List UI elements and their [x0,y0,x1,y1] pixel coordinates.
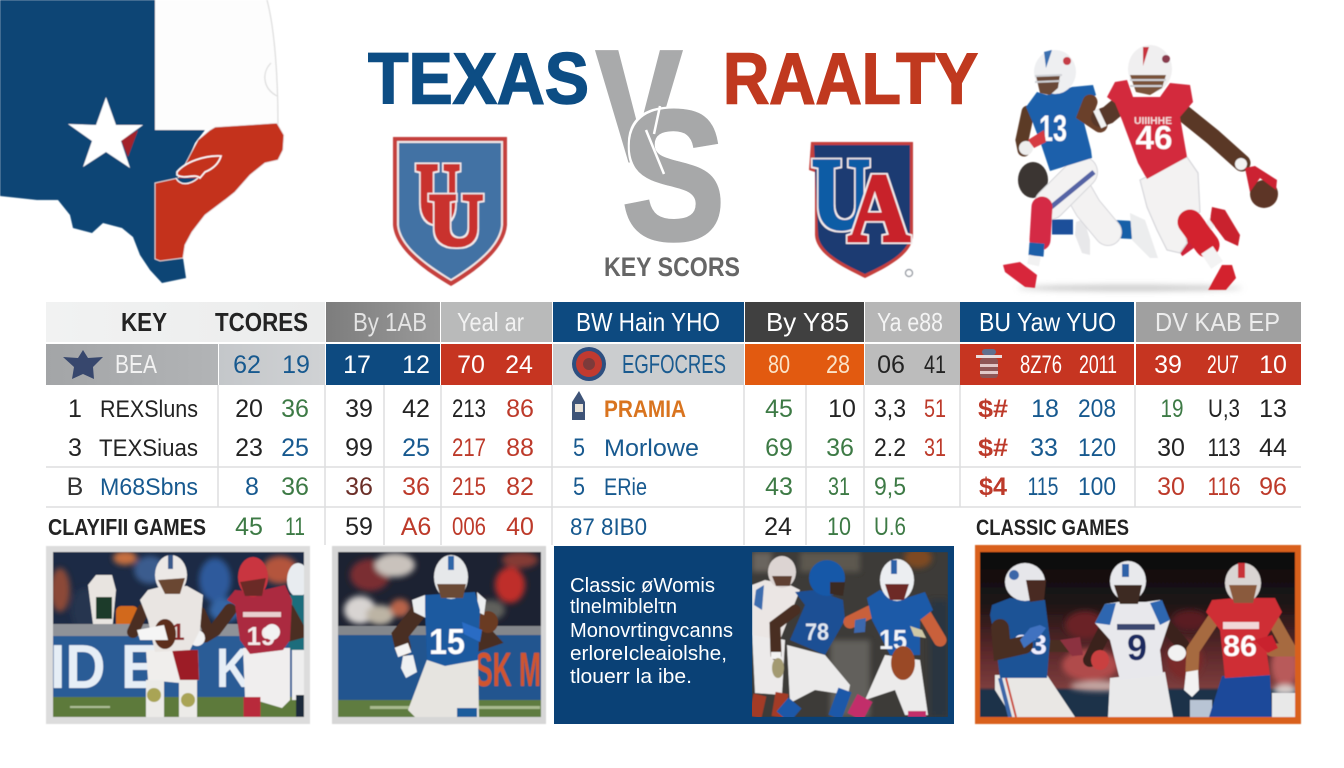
table row 1: 20 [235,395,263,423]
table team row: 2011 [1079,351,1117,379]
table row 1: REXSluns [100,396,198,423]
table row 1: PRAMIA [604,396,686,423]
table row 2: 5 [573,434,585,462]
table row 3: M68Sbns [100,474,198,501]
icon: VS mark: S [622,72,725,278]
icon: U shield: U [416,145,460,241]
table team row: 06 [877,351,905,379]
table header row: BU Yaw YUO [979,307,1116,337]
table row 3: 8 [245,473,259,501]
table header row: BW Hain YHO [576,307,720,337]
white player: 1 [171,619,185,646]
table row 3: 36 [345,473,373,501]
table row 2: 217 [452,434,486,462]
third player [287,563,309,717]
table row 4: classic games: 40 [506,513,534,541]
table row 4: classic games [48,513,1129,541]
table row 4: classic games: CLASSIC GAMES [976,515,1129,540]
paragraph [570,575,733,688]
table row 4: classic games: CLAYIFII GAMES [48,514,206,540]
table row 1: 51 [924,395,946,423]
middle player [771,560,850,717]
photo 2: blue jersey player [332,546,546,724]
blue player: 13 [1039,108,1067,149]
table row 2: 44 [1259,434,1287,462]
scoreboard table [46,302,1301,545]
table row 3: 115 [1028,473,1058,501]
right player [1184,563,1290,717]
paragraph: Classic øWomis [570,575,715,597]
table row 3: 82 [506,473,534,501]
table row 1: 213 [452,395,486,423]
table row 2: Morlowe [604,435,699,462]
blue player [1003,50,1158,288]
middle player: 78 [805,619,829,646]
table row 4: classic games: 11 [285,513,305,541]
right player: 15 [879,624,907,655]
table row 1: 45 [765,395,793,423]
table row 4: classic games: 87 8IB0 [570,514,647,541]
table row 3: 116 [1208,473,1240,501]
table header row: TCORES [215,307,308,337]
table row 4: classic games: 59 [345,513,373,541]
left player [990,563,1083,717]
table row 1: U,3 [1208,395,1240,423]
icon: UA shield: A [848,155,910,263]
icon: U shield: U [429,180,483,262]
red player: UIIIHHE [1134,116,1172,127]
banner text: ID E [50,633,158,702]
table row 3: ERie [604,474,647,501]
table team row: 17 [343,351,371,379]
table row 2: 69 [765,434,793,462]
table row 1: 36 [281,395,309,423]
table row 2: 88 [506,434,534,462]
table row 2: 36 [826,434,854,462]
panel: Texas map [0,0,284,283]
table header row: Ya e88 [877,307,943,337]
table header row: Yeal ar [457,307,524,337]
middle player [1090,561,1186,717]
table row 4: classic games: 45 [235,513,263,541]
icon: striped emblem [976,349,1002,378]
table row 4: classic games: A6 [401,513,431,541]
middle player: 9 [1127,627,1147,668]
banner letter: K [216,636,250,699]
table row 4: classic games: U.6 [874,513,906,541]
table team row: EGFOCRES [622,349,726,379]
title: Raalty: RAALTY [723,40,978,120]
back player [752,556,800,717]
player [395,555,498,717]
table row 2: 25 [281,434,309,462]
paragraph: tlnelmiblelτn [570,596,677,618]
player: 15 [429,621,465,662]
icon: U shield [393,137,507,286]
table row 1: 3,3 [874,395,906,423]
table team row: 70 [457,351,485,379]
table row 1: 19 [1160,395,1184,423]
table row 3: 43 [765,473,793,501]
table row 4: classic games: 10 [827,513,851,541]
table grid lines [46,385,1301,545]
table header row: By 1AB [353,307,427,337]
title: Texas: TEXAS [368,40,589,120]
icon: small mascot [572,391,585,420]
icon: UA shield: U [812,138,870,251]
photo 4: three players with orange border [975,545,1301,724]
table row 1: 18 [1031,395,1059,423]
table row 2: 3 [68,434,82,462]
table team row: 2U7 [1207,351,1239,379]
table team row: 28 [826,351,850,379]
table row 2: 31 [924,434,946,462]
paragraph: tlouerr la ibe. [570,666,692,688]
table row 1: 42 [402,395,430,423]
icon: UA shield [809,138,913,278]
table header row: By Y85 [766,307,849,337]
left player: 03 [1013,629,1047,660]
table team row: 41 [924,351,946,379]
table row 2: 120 [1078,434,1116,462]
red player: 19 [247,621,275,651]
table row 1: 208 [1078,395,1116,423]
table row 3: 100 [1078,473,1116,501]
red player [1096,45,1278,290]
table team row: 62 [233,351,261,379]
table row 2: 23 [235,434,263,462]
table row 3: $4 [979,473,1007,501]
table team row: 8Z76 [1020,351,1062,379]
table row 3: 215 [452,473,486,501]
icon: round crest [572,347,606,381]
table row 2: 30 [1157,434,1185,462]
white player [133,555,208,717]
paragraph: Monovrtingvcanns [570,620,733,642]
table row 1: 1 [68,395,82,423]
table row 3: 36 [402,473,430,501]
icon: VS mark: V [597,20,681,194]
table row 2 [68,434,1287,462]
table header row: DV KAB EP [1155,307,1280,337]
table row 1 [68,391,1287,423]
table team row: 19 [282,351,310,379]
table team row: 24 [505,351,533,379]
caption: key scores: KEY SCORS [604,252,740,282]
table team row [46,344,1301,385]
paragraph: erloreIcleaiolshe, [570,643,727,665]
table row 3: 30 [1157,473,1185,501]
table row 3 [67,473,1287,501]
illustration: two running football players [1003,45,1278,291]
table row 2: TEXSiuas [99,435,198,462]
table row 3: 31 [828,473,850,501]
table row 2: 33 [1030,434,1058,462]
table row 1: 13 [1259,395,1287,423]
table team row: 39 [1154,351,1182,379]
photo: three players [752,552,948,717]
table team row: 10 [1259,351,1287,379]
photo 1: white and red players [46,546,310,724]
table header row [46,302,1301,342]
table row 3: B [67,473,83,501]
table team row: 12 [402,351,430,379]
table row 1: 86 [506,395,534,423]
icon: star [63,350,103,379]
right player [850,559,940,717]
right player: 86 [1223,630,1257,663]
panel: classic games text and photo [554,546,954,724]
table team row: 80 [768,351,790,379]
red player [189,557,300,717]
table row 3: 96 [1259,473,1287,501]
table header row: KEY [121,307,167,337]
table row 3: 9,5 [874,473,906,501]
red player: 46 [1136,119,1172,156]
table row 1: $# [978,395,1008,423]
table row 2: 2.2 [874,434,906,462]
table team row: BEA [115,349,158,379]
table row 1: 10 [828,395,856,423]
table row 2: 25 [402,434,430,462]
table row 4: classic games: 24 [764,513,792,541]
table row 2: $# [978,434,1008,462]
table row 3: 36 [281,473,309,501]
icon: VS mark [597,20,725,278]
table row 3: 5 [573,473,585,501]
table row 2: 113 [1208,434,1240,462]
table row 4: classic games: 006 [452,513,486,541]
table row 1: 39 [345,395,373,423]
table row 2: 99 [345,434,373,462]
